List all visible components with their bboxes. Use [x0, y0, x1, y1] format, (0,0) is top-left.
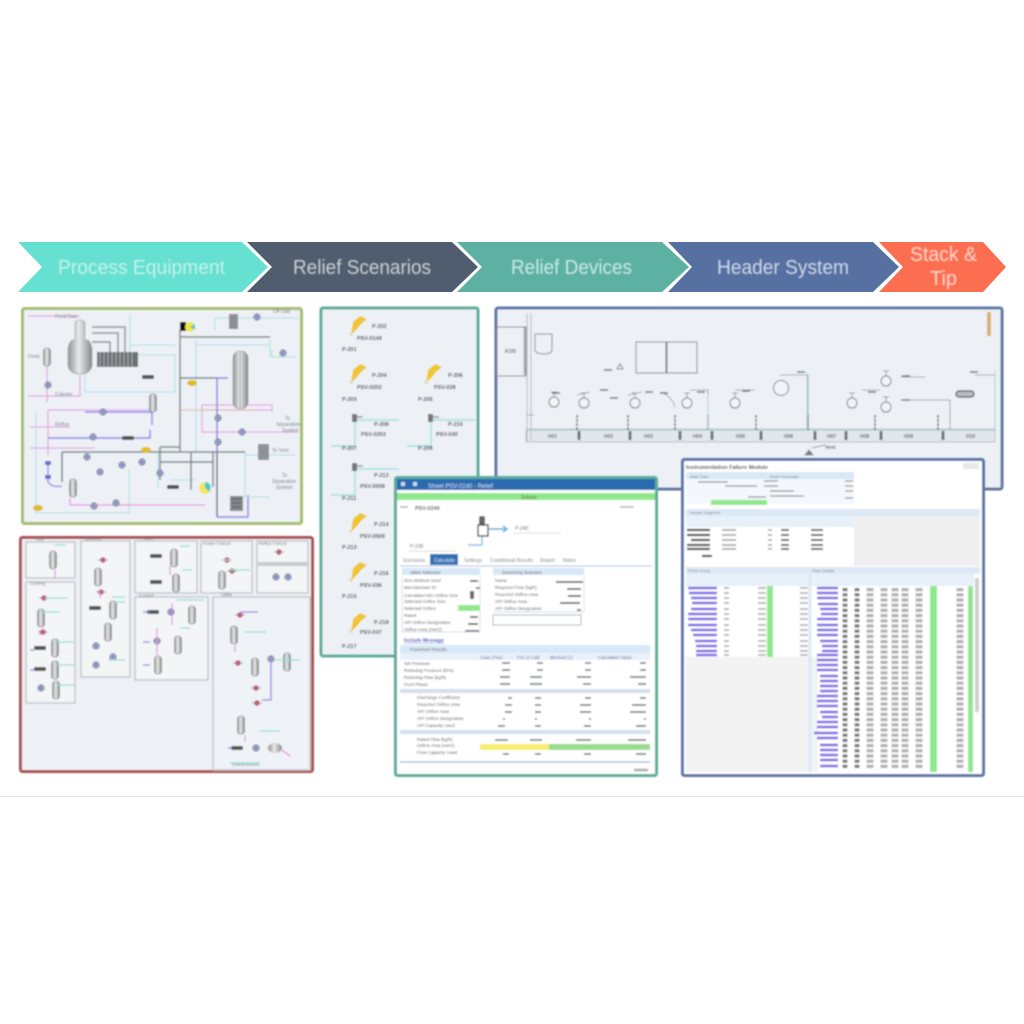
input and governing boxes: Governing Scenario: [502, 570, 542, 575]
relief valve labels: PSV-0203: [361, 432, 386, 438]
panel: relief scenarios (red): [20, 536, 312, 772]
results table: API Orifice Area: [417, 709, 450, 714]
header segment labels: KOD: [505, 349, 516, 355]
window heading: [686, 463, 979, 471]
header segment table: [686, 509, 980, 566]
device name row and icon: P-240: [515, 526, 529, 532]
input and governing boxes: API Orifice Area: [495, 599, 528, 604]
equipment symbols: [33, 314, 286, 511]
panel: header results table (blue): [682, 460, 984, 776]
relief valve labels: P-210: [448, 422, 463, 428]
relief valve labels: P-204: [372, 373, 388, 379]
results table: Blocked (1): [550, 655, 573, 660]
small stream labels: To: [285, 416, 290, 422]
step: Header System: Header System: [717, 257, 849, 279]
small stream labels: Separation: [276, 422, 300, 428]
small stream labels: To Vent: [272, 448, 289, 454]
header segment labels: Vent: [825, 445, 836, 451]
input and governing boxes: Valve Selection: [410, 570, 441, 575]
input and governing boxes: [402, 568, 584, 632]
right device list: Flare Details: [812, 568, 834, 573]
relief valve labels: P-212: [374, 473, 389, 479]
results table: Discharge Coefficient: [417, 695, 460, 700]
small stream labels: Reflux: [55, 422, 70, 428]
header segment labels: H09: [904, 434, 913, 440]
relief valve labels: P-213: [342, 545, 357, 551]
step: Relief Devices: [457, 242, 689, 292]
relief valve labels: P-208: [374, 422, 389, 428]
step: Stack and Tip: Stack &: [910, 244, 978, 266]
relief valve labels: P-217: [342, 644, 357, 650]
knockout box and tanks: [497, 327, 697, 376]
results table: Calculated Value: [598, 655, 632, 660]
results table: API Capacity Used: [417, 723, 455, 728]
input and governing boxes: API Orifice Designation: [404, 620, 451, 625]
small stream labels: Feed Gas: [55, 314, 77, 320]
input and governing boxes: Manufacturer ID: [404, 585, 437, 590]
relief valve labels: PSV-030: [436, 432, 458, 438]
results table: Orifice Area (mm2): [417, 743, 455, 748]
device name row and icon: P-239: [410, 544, 424, 550]
process chevron bar: [18, 242, 1006, 292]
tabs: Conditional Results: [490, 558, 534, 564]
tabs: [400, 554, 652, 566]
relief valve labels: P-216: [374, 571, 389, 577]
small stream labels: Column: [55, 392, 72, 398]
right device list: [808, 568, 979, 772]
header segment labels: H03: [644, 434, 653, 440]
results table: Fire (2 Cal): [517, 655, 540, 660]
input and governing boxes: Required Orifice Area: [495, 592, 539, 597]
results table: [400, 638, 650, 770]
header segment labels: H01: [548, 434, 557, 440]
input and governing boxes: API Orifice Designation: [495, 606, 542, 611]
header segment labels: H10: [966, 434, 975, 440]
header connection lines: [527, 375, 995, 430]
scenario equipment symbols: [34, 549, 291, 753]
small stream labels: Off Gas: [273, 309, 291, 315]
header segment labels: H06: [784, 434, 793, 440]
relief valve labels: P-218: [374, 620, 389, 626]
input and governing boxes: Calculated Min Orifice Size: [404, 593, 459, 598]
header segment labels: H02: [604, 434, 613, 440]
small stream labels: System: [282, 428, 299, 434]
panel: header system flowsheet (blue): [496, 308, 1002, 489]
scenario box labels: Cooling: [30, 581, 46, 586]
results table: Required Orifice Area: [417, 702, 461, 707]
icon: distillation column: [233, 351, 248, 409]
input and governing boxes: Rated: [404, 613, 417, 618]
relief valve labels: P-214: [374, 522, 390, 528]
results table: Flowsheet Results: [410, 647, 448, 652]
header segment labels: H08: [860, 434, 869, 440]
relief valve labels: P-206: [448, 373, 463, 379]
scenario box labels: Reflux Failure: [259, 541, 287, 546]
relief valve labels: PSV-0508: [360, 484, 385, 490]
scenario box labels: Power: [141, 536, 154, 541]
grey main headers: [62, 330, 270, 517]
step: Stack and Tip: [879, 242, 1006, 292]
results table: Rated Flow (kg/h): [417, 737, 453, 742]
input and governing boxes: Required Flow (kg/h): [495, 585, 537, 590]
scenario box labels: Blocked: [85, 536, 102, 541]
relief valve labels: PSV-037: [360, 630, 382, 636]
step: Relief Scenarios: Relief Scenarios: [293, 257, 431, 279]
relief valve labels: PSV-0509: [360, 534, 385, 540]
small stream labels: Feed: [28, 354, 40, 360]
input and governing boxes: Set Calc From Governing Scenario: [498, 618, 568, 623]
relief valve labels: P-203: [342, 397, 357, 403]
panel: process flowsheet (green): [22, 308, 302, 524]
input and governing boxes: Size Method Used: [404, 578, 441, 583]
results table: Relieving Pressure (kPa): [404, 668, 454, 673]
step: Process Equipment: [18, 242, 268, 292]
input and governing boxes: Orifice Area (mm2): [404, 627, 442, 632]
tabs: Notes: [563, 558, 577, 564]
flare header band: [525, 313, 995, 442]
header stream tags: [552, 370, 978, 400]
summary boxes: Relief Summary: [770, 474, 798, 479]
scenario box labels: Utility: [221, 592, 233, 597]
relief valve labels: PSV-028: [434, 385, 456, 391]
small stream labels: Separation: [272, 479, 296, 485]
pumps and equipment on header: [549, 312, 991, 412]
relief valve labels: [342, 324, 463, 650]
window title bar: [397, 479, 655, 501]
tabs: Settings: [464, 558, 483, 564]
scenario box labels: Power Failure: [203, 541, 231, 546]
small stream labels: System: [276, 485, 293, 491]
step: Stack and Tip: Tip: [930, 268, 957, 290]
results table: Selected Size: [412, 729, 440, 734]
left device list: PSVs Group: [688, 568, 711, 573]
step: Process Equipment: Process Equipment: [58, 257, 225, 279]
results table: Relieving Flow (kg/h): [404, 675, 447, 680]
scenario box labels: Control: [139, 593, 154, 598]
panel: relief devices list (teal): [321, 308, 478, 656]
step: Header System: [668, 242, 899, 292]
input and governing boxes: Name: [495, 578, 508, 583]
icon: reactor with stacked coils: [68, 320, 138, 374]
relief valve labels: PSV-0149: [357, 336, 382, 342]
step: Relief Scenarios: [247, 242, 478, 292]
scenario piping: [40, 545, 300, 763]
results table: Fluid Phase: [404, 682, 428, 687]
relief valve labels: P-209: [418, 446, 433, 452]
small stream labels: [28, 309, 300, 491]
scenario box labels: Overpressure: [232, 762, 260, 767]
summary boxes: Main Data: [690, 474, 709, 479]
process piping lines: [28, 315, 298, 517]
results table: Set Pressure: [404, 661, 431, 666]
results table: Include Message: [404, 638, 444, 644]
device name row and icon: PSV-0240: [415, 506, 440, 512]
header segment labels: H05: [736, 434, 745, 440]
window title bar: Solved: [521, 495, 537, 501]
header segment labels: H07: [827, 434, 836, 440]
tabs: Scenarios: [403, 558, 426, 564]
scenario box labels: [30, 536, 287, 767]
relief valve labels: P-207: [342, 446, 357, 452]
results table: Case (Fire): [480, 655, 503, 660]
window title bar: Sheet PSV-0240 - Relief: [428, 484, 493, 490]
device name row and icon: [400, 506, 634, 551]
header segment labels: H04: [693, 434, 702, 440]
relief valve labels: P-201: [342, 347, 357, 353]
summary boxes: [686, 472, 854, 505]
relief valve labels: P-215: [342, 594, 357, 600]
results table: Flow Capacity Used: [417, 750, 458, 755]
relief valve icons: [331, 316, 475, 633]
tabs: Report: [540, 558, 556, 564]
panel: device sizing window (teal): [396, 478, 656, 776]
header segment labels: [505, 349, 975, 451]
input and governing boxes: Selected Orifice: [404, 606, 436, 611]
header segment table: Header Segment: [690, 510, 721, 515]
window heading: Instrumentation Failure Module: [686, 465, 768, 471]
tabs: Calculate: [434, 558, 455, 564]
input and governing boxes: Selected Orifice Size: [404, 599, 446, 604]
results table: API Orifice Designation: [417, 716, 464, 721]
relief valve labels: P-205: [418, 397, 433, 403]
relief valve labels: PSV-036: [360, 583, 382, 589]
relief valve labels: P-211: [342, 496, 356, 502]
scenario box labels: Fire: [36, 537, 44, 542]
scenario sub-boxes: [26, 541, 310, 770]
results table: Required Size: [412, 689, 441, 694]
small stream labels: To: [282, 473, 288, 479]
relief valve labels: P-202: [372, 324, 387, 330]
relief valve labels: PSV-0202: [357, 385, 382, 391]
left device list: [686, 567, 980, 772]
step: Relief Devices: Relief Devices: [511, 257, 632, 279]
